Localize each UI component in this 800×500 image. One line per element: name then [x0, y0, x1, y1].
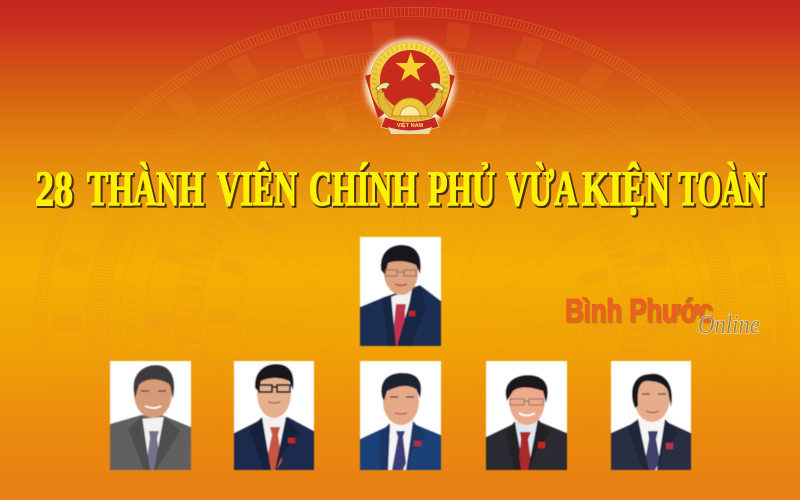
emblem rice and leaves [376, 83, 444, 92]
portrait: top center [360, 237, 441, 346]
emblem side ribbons [365, 74, 455, 118]
emblem glow [365, 39, 455, 129]
portrait: bottom 5 [611, 361, 691, 470]
portrait: bottom 3 [360, 361, 441, 470]
logo: Binh Phuoc Online: Online [698, 310, 760, 339]
title: THÀNH [87, 160, 204, 216]
title: CHÍNH [309, 160, 417, 216]
portrait: bottom 4 [486, 361, 567, 470]
portrait: bottom 2 [234, 361, 314, 470]
title: 28 [35, 160, 73, 216]
title: VIÊN [217, 160, 297, 216]
logo: Binh Phuoc Online: Bình Phước [565, 292, 713, 329]
background pattern: bronze drum motif [34, 6, 790, 371]
title: KIỆN [582, 160, 670, 216]
portrait: bottom 1 [110, 361, 191, 470]
title: VỪA [506, 160, 577, 216]
title [35, 160, 765, 216]
emblem banner: VIỆT NAM [397, 121, 424, 129]
emblem gear [392, 98, 428, 116]
emblem red disc [380, 50, 440, 110]
national emblem [365, 39, 455, 134]
title: PHỦ [428, 160, 495, 216]
emblem gold ring [370, 42, 450, 122]
emblem star [395, 52, 426, 81]
